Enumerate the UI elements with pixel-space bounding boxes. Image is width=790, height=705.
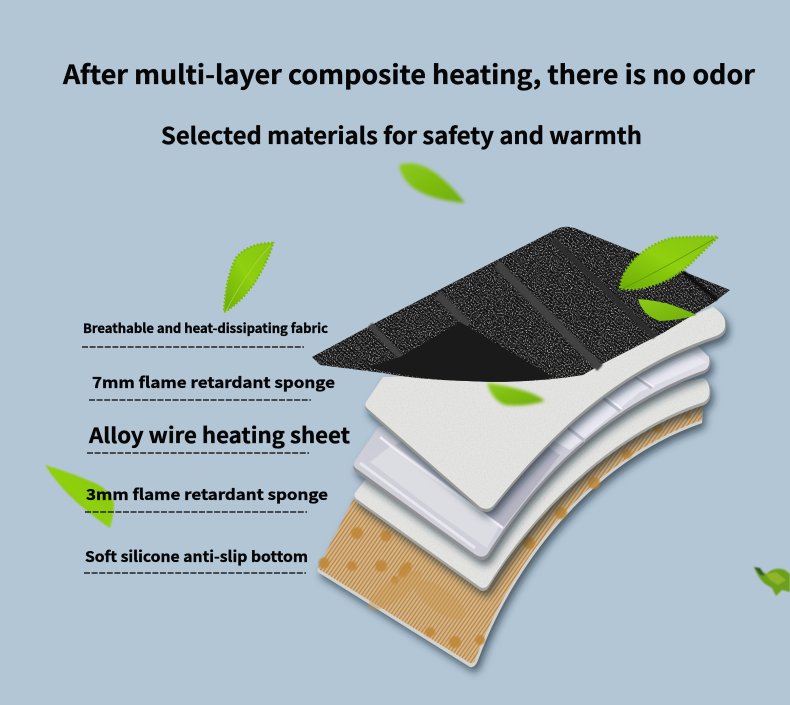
product: layered heating pad	[312, 227, 730, 667]
leaf: upper left	[224, 243, 273, 312]
label: alloy sheet: Alloy wire heating sheet	[88, 420, 350, 450]
leaf: far right	[754, 567, 790, 596]
label: 7mm sponge: 7mm flame retardant sponge	[92, 371, 335, 393]
leaf: blurred top	[399, 163, 465, 203]
leaf: blurred on sponge	[487, 383, 545, 406]
layer: silicone anti-slip bottom	[317, 405, 703, 667]
fabric folded backing	[367, 322, 553, 382]
layer: 7mm flame retardant sponge	[365, 307, 726, 512]
subtitle: Selected materials for safety and warmth	[161, 117, 642, 151]
layer: breathable fabric	[312, 227, 730, 382]
title: After multi-layer composite heating, there is no odor	[62, 55, 756, 92]
leaf: blurred left	[45, 465, 114, 528]
label: silicone bottom: Soft silicone anti-slip bottom	[85, 546, 308, 567]
leaf: large green on fabric	[618, 237, 718, 291]
layer: 3mm flame retardant sponge	[354, 378, 710, 591]
label: fabric: Breathable and heat-dissipating fabric	[83, 318, 328, 337]
leaf: small green on fabric	[638, 299, 697, 321]
layer: alloy wire heating sheet	[353, 345, 710, 560]
fabric grooves	[370, 240, 717, 368]
label: 3mm sponge: 3mm flame retardant sponge	[86, 483, 328, 505]
